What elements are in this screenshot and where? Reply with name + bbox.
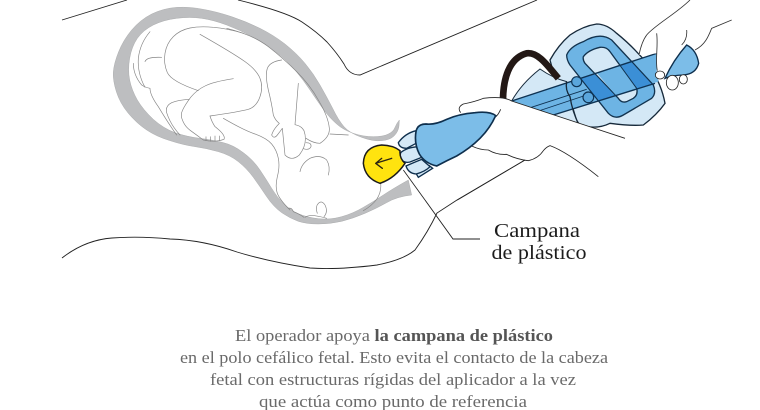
description text: fetal con estructuras rígidas del aplicador a la vez bbox=[210, 370, 576, 389]
band and ring overlap bbox=[582, 62, 652, 100]
band edges bbox=[512, 53, 657, 115]
fetus outline bbox=[133, 27, 381, 218]
right hand lines bbox=[639, 0, 732, 71]
description text: en el polo cefálico fetal. Esto evita el contacto de la cabeza bbox=[180, 348, 608, 367]
description text: El operador apoya la campana de plástico bbox=[235, 326, 553, 345]
callout label second line: de plástico bbox=[492, 242, 586, 264]
callout label: Campana bbox=[494, 220, 580, 242]
fingers bbox=[398, 131, 433, 177]
blue glove bbox=[415, 112, 496, 166]
applicator pad bbox=[550, 24, 665, 127]
callout leader bbox=[425, 200, 480, 239]
seam bbox=[566, 82, 579, 125]
uterus and fetus bbox=[113, 7, 412, 224]
band through ring bbox=[597, 66, 636, 95]
mother's body outline bbox=[62, 0, 537, 269]
right hand bbox=[639, 0, 732, 80]
left arm bbox=[458, 97, 625, 177]
ring opening bbox=[583, 47, 637, 102]
plastic bell bbox=[363, 145, 405, 183]
pad flap bbox=[512, 69, 578, 125]
applicator and hands bbox=[363, 0, 732, 200]
arm lines bbox=[457, 98, 625, 200]
black cable bbox=[503, 53, 558, 99]
description text bbox=[180, 326, 608, 410]
right blue glove bbox=[665, 45, 699, 78]
rivets bbox=[572, 77, 594, 103]
right hand fingers bbox=[655, 71, 687, 90]
plastic bell leader bbox=[403, 170, 425, 200]
uterine wall bbox=[113, 7, 412, 224]
applicator band bbox=[512, 53, 658, 115]
ring handle bbox=[567, 36, 655, 117]
bell arrow bbox=[376, 158, 392, 168]
